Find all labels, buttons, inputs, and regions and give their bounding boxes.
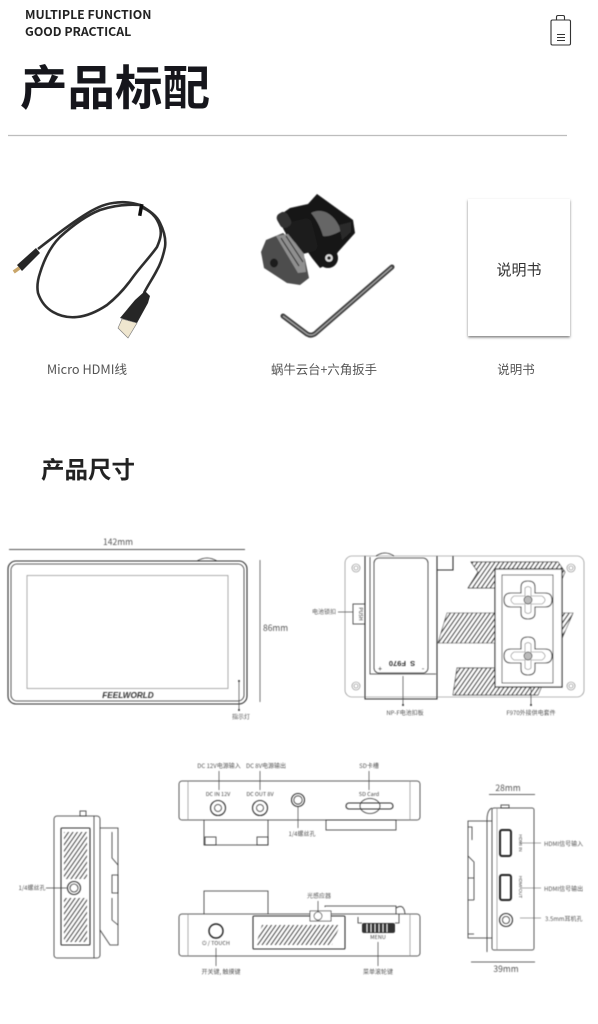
drawing: left side view: 1/4螺丝孔 [18,883,46,892]
drawing: back view: 电池锁扣 [312,607,336,616]
drawing: front view: 142mm [103,536,133,548]
panel: accessories [13,194,570,378]
drawing: top view: DC OUT 8V [246,790,274,798]
drawing: right side view: HDMI OUT [518,876,523,898]
drawing: back view: + [378,666,382,673]
header tagline [25,5,151,40]
drawing: bottom view [179,891,420,976]
drawing: bottom view: 光感应器 [307,891,331,900]
drawing: bottom view: ⏻ / TOUCH [202,939,230,947]
drawing: back view: - [422,666,425,673]
drawing: back view: NP-F电池扣板 [386,708,424,717]
drawing: right side view: 28mm [495,782,521,794]
heading: product dimensions: 产品尺寸 [41,451,135,485]
title: 产品标配 [20,50,210,119]
header tagline: MULTIPLE FUNCTION [25,5,151,23]
drawing: back view: F970外接供电套件 [506,708,556,717]
drawing: front view [8,536,288,721]
drawing: front view: FEELWORLD [102,691,154,700]
cross knob 2 [504,637,552,675]
drawing: back view [312,553,584,717]
drawing: top view: 1/4螺丝孔 [288,829,316,838]
drawing: top view: DC IN 12V [206,790,231,798]
label: gimbal and wrench: 蜗牛云台+六角扳手 [271,360,377,378]
item: manual: 说明书 [496,259,542,280]
drawing: top view: DC 8V电源输出 [246,761,286,770]
drawing: top view [179,761,420,845]
drawing: back view: PUSH [357,607,364,621]
drawing: right side view [468,782,583,975]
drawing: bottom view: 开关键, 触摸键 [201,967,241,976]
drawing: right side view: HDMI信号输入 [544,839,583,848]
drawing: right side view: 3.5mm耳机孔 [545,914,582,923]
label: micro HDMI: Micro HDMI线 [47,359,127,378]
panel: dimension drawings [8,536,584,976]
drawing: back view: S F970 [389,659,415,668]
item: manual [468,199,570,336]
drawing: top view: DC 12V电源输入 [197,761,241,770]
drawing: right side view: HDMI信号输出 [544,884,583,893]
label: manual: 说明书 [497,359,535,378]
drawing: bottom view: MENU [370,933,386,941]
drawing: front view: 86mm [263,622,288,634]
header tagline: GOOD PRACTICAL [25,22,131,40]
icon: battery [551,16,570,45]
drawing: bottom view: 菜单滚轮键 [363,967,393,976]
item: gimbal and hex wrench [261,194,392,335]
item: micro HDMI cable [13,202,165,338]
drawing: left side view [18,811,118,958]
drawing: top view: SD卡槽 [359,761,379,770]
drawing: right side view: HDMI IN [518,834,523,852]
drawing: front view: 指示灯 [232,712,250,721]
drawing: top view: SD Card [359,790,379,798]
cross knob 1 [504,581,552,619]
drawing: right side view: 39mm [493,963,519,975]
